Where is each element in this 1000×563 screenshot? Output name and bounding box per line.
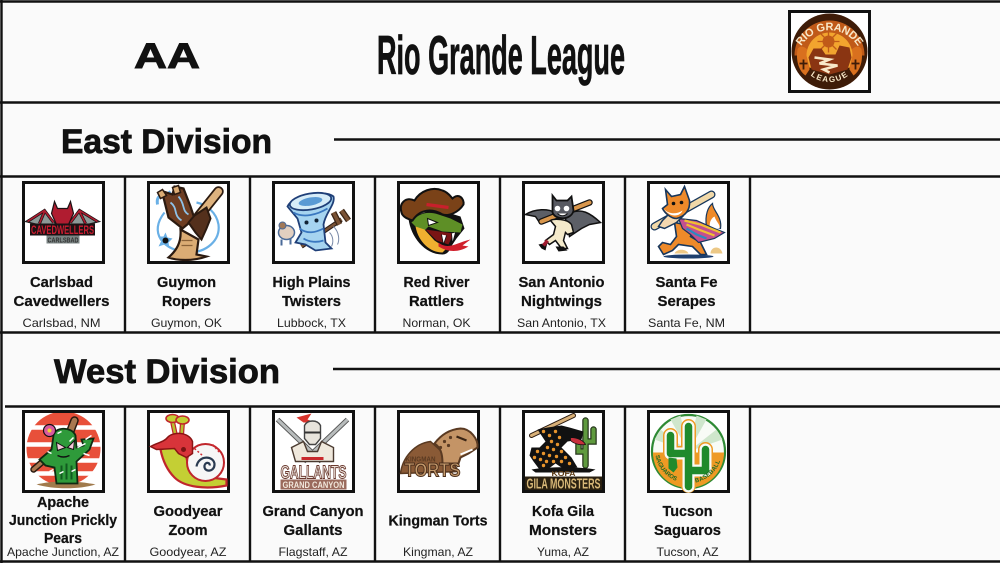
team name: Pears xyxy=(44,531,82,547)
divider: West Division rule xyxy=(333,368,1000,370)
icon: Gallants knight logo: GALLANTS xyxy=(280,462,346,482)
panel: Grand Canyon Gallants xyxy=(262,412,364,559)
icon: Torts tortoise logo xyxy=(398,412,478,492)
team name: Monsters xyxy=(529,523,597,539)
team name: Kingman Torts xyxy=(388,514,488,530)
team name: Red River xyxy=(404,275,470,291)
team city: Tucson, AZ xyxy=(656,545,718,559)
team city: Kingman, AZ xyxy=(403,545,473,559)
panel: Guymon Ropers xyxy=(148,182,228,330)
team city: San Antonio, TX xyxy=(517,316,606,330)
team name: Carlsbad xyxy=(30,275,93,291)
team name: Tucson xyxy=(662,504,712,520)
team city: Guymon, OK xyxy=(151,316,222,330)
team name: Rattlers xyxy=(409,294,464,310)
icon: Gila Monsters lizard logo xyxy=(524,412,604,492)
icon: Rattlers snake logo xyxy=(398,182,478,262)
team name: Santa Fe xyxy=(656,275,718,291)
icon: Saguaros cactus logo: SAGUAROS xyxy=(656,455,678,480)
team name: Goodyear xyxy=(154,504,223,520)
team city: Lubbock, TX xyxy=(277,316,346,330)
icon: league logo xyxy=(788,10,871,93)
team name: San Antonio xyxy=(518,275,605,291)
panel: Tucson Saguaros xyxy=(647,410,730,559)
team city: Yuma, AZ xyxy=(537,545,589,559)
icon: Ropers boot and bat logo xyxy=(148,182,228,262)
icon: Gila Monsters lizard logo: GILA MONSTERS xyxy=(526,476,600,492)
panel: San Antonio Nightwings xyxy=(517,182,606,330)
panel: Red River Rattlers xyxy=(398,182,478,330)
team city: Goodyear, AZ xyxy=(150,545,226,559)
header: league level: AA xyxy=(134,37,200,76)
icon: Twisters tornado logo xyxy=(274,182,354,262)
icon: Gila Monsters lizard logo: KOFA xyxy=(552,471,576,478)
team city: Flagstaff, AZ xyxy=(278,545,348,559)
team name: Gallants xyxy=(284,523,342,539)
heading: East Division: East Division xyxy=(61,123,272,161)
icon: league logo: RIO GRANDE xyxy=(796,22,864,46)
team name: Kofa Gila xyxy=(532,504,595,520)
team name: Guymon xyxy=(157,275,216,291)
team city: Santa Fe, NM xyxy=(648,316,725,330)
panel: Santa Fe Serapes xyxy=(648,182,728,330)
icon: Serapes fox logo xyxy=(648,182,728,262)
infographic canvas: Rio Grande League xyxy=(377,24,625,86)
team name: Grand Canyon xyxy=(262,504,364,520)
panel: Goodyear Zoom xyxy=(148,412,228,559)
icon: Cavedwellers bat logo: CAVEDWELLERS xyxy=(31,223,94,237)
divider: East Division rule xyxy=(334,138,1000,141)
panel: Carlsbad Cavedwellers xyxy=(14,182,110,330)
team name: Nightwings xyxy=(521,294,602,310)
team name: Ropers xyxy=(162,294,211,310)
icon: Saguaros cactus logo: BASEBALL xyxy=(694,460,720,482)
icon: Prickly Pears cactus logo xyxy=(24,412,104,492)
heading: West Division: West Division xyxy=(54,353,280,391)
icon: Torts tortoise logo: KINGMAN xyxy=(406,456,436,464)
icon: Cavedwellers bat logo xyxy=(24,182,104,262)
icon: Torts tortoise logo: TORTS xyxy=(404,460,460,482)
icon: league logo: LEAGUE xyxy=(810,71,848,82)
icon: Saguaros cactus logo xyxy=(647,410,730,493)
panel: Kingman Torts xyxy=(388,412,488,559)
icon: Gallants knight logo xyxy=(274,412,354,492)
team name: Cavedwellers xyxy=(14,294,110,310)
team city: Carlsbad, NM xyxy=(22,316,100,330)
icon: Zoom snail logo xyxy=(148,412,228,492)
team name: Apache xyxy=(37,495,89,511)
icon: Nightwings bat logo xyxy=(524,182,604,262)
team name: Twisters xyxy=(282,294,341,310)
panel: High Plains Twisters xyxy=(272,182,354,330)
panel: Kofa Gila Monsters xyxy=(524,412,604,559)
team city: Apache Junction, AZ xyxy=(7,545,119,559)
team name: Serapes xyxy=(658,294,716,310)
panel: Apache Junction Prickly Pears xyxy=(7,412,119,559)
icon: Cavedwellers bat logo: CARLSBAD xyxy=(48,236,79,244)
team name: Zoom xyxy=(168,523,208,539)
team name: Junction Prickly xyxy=(9,513,117,529)
team name: High Plains xyxy=(272,275,350,291)
team city: Norman, OK xyxy=(402,316,470,330)
icon: Gallants knight logo: GRAND CANYON xyxy=(282,480,344,490)
team name: Saguaros xyxy=(654,523,721,539)
